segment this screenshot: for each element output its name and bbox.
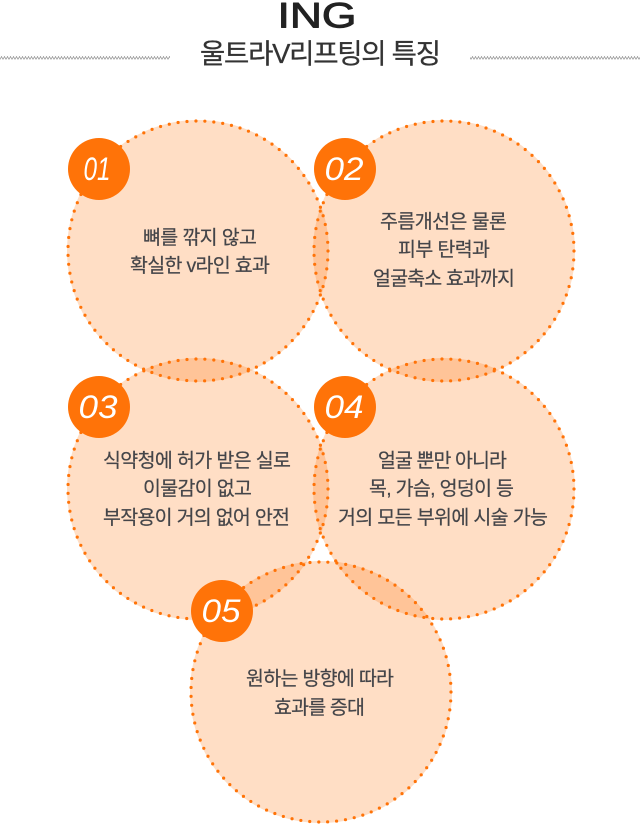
text 01: 뼈를 깎지 않고 xyxy=(143,227,257,249)
text 05: 효과를 증대 xyxy=(274,697,365,719)
text 02: 주름개선은 물론 xyxy=(380,211,507,233)
badge 05 xyxy=(191,580,253,642)
badge 04 xyxy=(314,376,376,438)
badge 03 xyxy=(68,376,130,438)
panel: feature 05 xyxy=(190,561,452,823)
text 01: 확실한 v라인 효과 xyxy=(130,255,270,277)
text 02: 피부 탄력과 xyxy=(398,239,490,261)
text 03: 부작용이 거의 없어 안전 xyxy=(103,507,290,529)
text 05: 원하는 방향에 따라 xyxy=(246,668,394,690)
divider left xyxy=(0,56,170,60)
badge 03: 03 xyxy=(78,389,118,425)
badge 01: 01 xyxy=(84,151,110,187)
badge 04: 04 xyxy=(324,389,364,425)
badge 02: 02 xyxy=(324,151,364,187)
text 03: 식약청에 허가 받은 실로 xyxy=(103,450,291,472)
text 04 xyxy=(338,450,548,529)
text 03 xyxy=(103,450,291,529)
badge 05: 05 xyxy=(202,593,241,629)
text 03: 이물감이 없고 xyxy=(143,478,252,500)
panel: feature 01 xyxy=(67,120,329,382)
divider right xyxy=(470,56,640,60)
text 04: 목, 가슴, 엉덩이 등 xyxy=(369,478,514,500)
text 04: 얼굴 뿐만 아니라 xyxy=(378,450,507,472)
panel: feature 04 xyxy=(313,358,575,620)
text 04: 거의 모든 부위에 시술 가능 xyxy=(338,507,548,529)
text 05 xyxy=(246,668,394,719)
text 01 xyxy=(130,227,270,277)
text 02: 얼굴축소 효과까지 xyxy=(373,268,515,290)
panel: feature 03 xyxy=(67,358,329,620)
panel: feature 02 xyxy=(313,120,575,382)
badge 01 xyxy=(68,138,130,200)
subtitle: 울트라V리프팅의 특징 xyxy=(200,38,441,69)
badge 02 xyxy=(314,138,376,200)
header xyxy=(0,0,640,69)
text 02 xyxy=(373,211,515,290)
